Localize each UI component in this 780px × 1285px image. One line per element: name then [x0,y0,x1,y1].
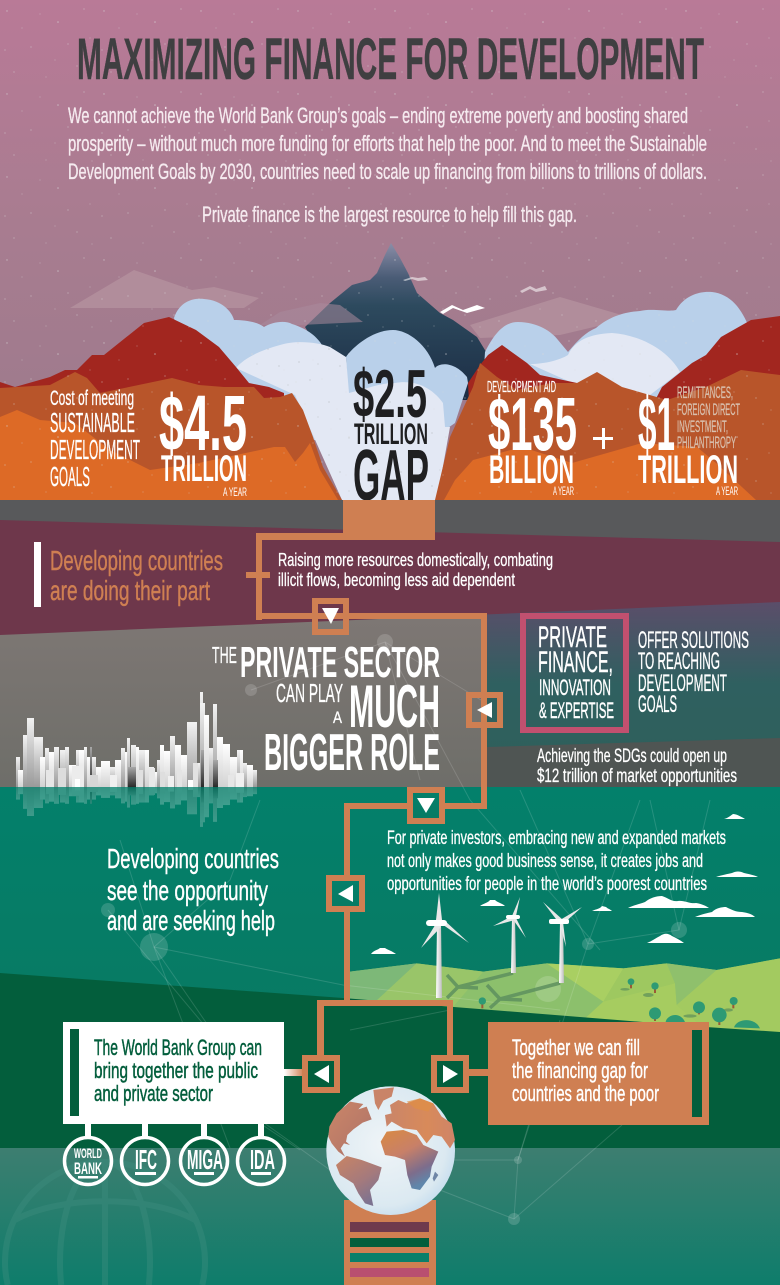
heading: the private sector can play a much bigger role [212,638,440,782]
panel: world bank group white box: and private sector [94,1081,213,1106]
callout bar: white marker [34,542,41,607]
red mountain range [0,316,780,440]
wind turbine 2 [493,897,526,973]
speckle texture over the sky and mountains [0,0,780,500]
node: green left arrow [329,878,362,909]
light blue clouds behind the mountains [174,292,750,440]
heading: developing countries are doing their part: are doing their part [50,575,210,606]
panel: world bank group white box [63,1022,284,1124]
panel: together we can fill box: the financing gap for [512,1058,648,1083]
heading: the private sector can play a much bigger role: PRIVATE SECTOR [240,638,440,687]
haze in front of the peak [260,303,363,325]
panel: private finance box: INNOVATION [539,675,611,700]
panel: together we can fill box: Together we can fill [512,1035,640,1060]
heading: developing countries see the opportunity: Developing countries [107,843,279,874]
heading: developing countries see the opportunity [107,843,279,936]
logos: world bank group institutions: MIGA [187,1144,223,1175]
text: GAP [353,436,429,516]
node: left arrow to world bank box [305,1058,337,1090]
stat: cost of SDGs $4.5 trillion: TRILLION [161,448,247,489]
stat: $2.5 trillion gap [353,356,429,516]
logo watermark: globe [5,1162,205,1285]
connector fade from white box [284,1069,304,1076]
panel: world bank group white box: bring together the public [94,1058,258,1083]
stat: cost of SDGs $4.5 trillion: $4.5 [159,378,247,467]
stat: cost of SDGs $4.5 trillion: DEVELOPMENT [50,434,140,465]
network of connecting lines [108,642,710,1219]
logos: world bank group institutions [64,1124,284,1184]
trees [479,978,760,1028]
wind turbine 3 [543,902,582,983]
skyline with reflection [16,692,257,827]
panel: green band [0,787,780,1017]
speckle texture on the clouds [236,342,445,500]
small white clouds [371,814,758,954]
heading: the private sector can play a much bigger role: THE [212,642,237,668]
stat: development aid $135 billion: DEVELOPMENT AID [487,379,556,396]
node: lower down arrow [410,790,442,821]
plus sign [593,428,613,449]
stat: $1 trillion remittances: $1 [638,382,675,466]
central dark mountain peak [305,243,488,400]
wind turbine 1 [421,893,469,998]
stat: $2.5 trillion gap: TRILLION [354,418,428,451]
panel: plum developing countries band [0,520,780,635]
panel: market opportunity band [487,738,780,787]
panel: grey private sector background [0,600,487,787]
heading: developing countries are doing their part [50,545,223,606]
stat: development aid $135 billion: BILLION [489,448,574,492]
orange connector lines [246,500,489,1076]
node: left arrow [469,695,500,725]
panel: private finance box: PRIVATE [538,621,607,654]
panel: dark green band [0,973,780,1148]
logos: world bank group institutions: IFC [135,1144,157,1175]
text: market opportunities [537,746,737,787]
text: raising more resources: illicit flows, becoming less aid dependent [278,570,515,590]
turbine shadows [447,973,560,1008]
stat: development aid $135 billion: $135 [488,382,577,466]
front orange hills [0,410,756,500]
stat: cost of SDGs $4.5 trillion [50,378,247,499]
text: private investors [387,828,726,895]
panel: together we can fill box: countries and the poor [512,1081,659,1106]
landscape hills [350,958,780,1037]
panel: world bank group white box: The World Bank Group can [94,1035,262,1060]
mid orange mountain range [0,363,780,500]
icon: globe [326,1086,455,1215]
birds [403,277,547,314]
stat: $2.5 trillion gap: $2.5 [353,356,427,432]
text: raising more resources [278,550,553,590]
panel: grey band [0,500,780,620]
panel: private finance box: & EXPERTISE [539,698,614,723]
hazy distant mountains [70,270,632,338]
node: right arrow to together box [434,1058,466,1090]
logos: world bank group institutions: IDA [250,1144,275,1175]
panel: together we can fill box [488,1022,709,1125]
stat: cost of SDGs $4.5 trillion: SUSTAINABLE [50,407,135,438]
stat: $1 trillion remittances: A YEAR [716,484,738,498]
heading: developing countries are doing their part: Developing countries [50,545,223,576]
stat: development aid $135 billion: A YEAR [553,484,574,498]
panel: private finance box [523,616,626,730]
stat: development aid $135 billion [487,379,577,498]
pale white clouds and funnel [236,333,680,500]
intro text: Private finance is the largest resource to help fill this gap. [202,202,577,227]
column below the globe with colour bars [344,1200,436,1285]
stat: cost of SDGs $4.5 trillion: A YEAR [223,485,247,499]
panel: teal purple right background [487,600,780,787]
panel: lower teal band [0,1148,780,1285]
stat: $1 trillion remittances [638,382,740,498]
panel: mauve sky background [0,0,780,500]
text: BIGGER ROLE [264,724,440,782]
network nodes [101,634,687,1225]
heading: the private sector can play a much bigger role: MUCH [349,673,440,740]
text: raising more resources: Raising more resources domestically, combating [278,550,553,570]
heading: the private sector can play a much bigger role: CAN PLAY [276,678,343,708]
stat: cost of SDGs $4.5 trillion: GOALS [50,461,90,492]
panel: private finance box: FINANCE, [538,646,613,679]
node: down arrow [315,601,346,632]
text: offer solutions: GOALS [638,691,677,718]
stat: cost of SDGs $4.5 trillion: Cost of meeting [50,387,134,410]
logos: world bank group institutions: BANK [74,1159,102,1178]
heading: developing countries see the opportunity: see the opportunity [107,875,268,906]
heading: the private sector can play a much bigger role: A [333,708,343,727]
intro text [68,103,707,227]
logos: world bank group institutions: WORLD [74,1145,102,1161]
text: offer solutions [638,627,749,718]
heading: developing countries see the opportunity: and are seeking help [107,905,275,936]
